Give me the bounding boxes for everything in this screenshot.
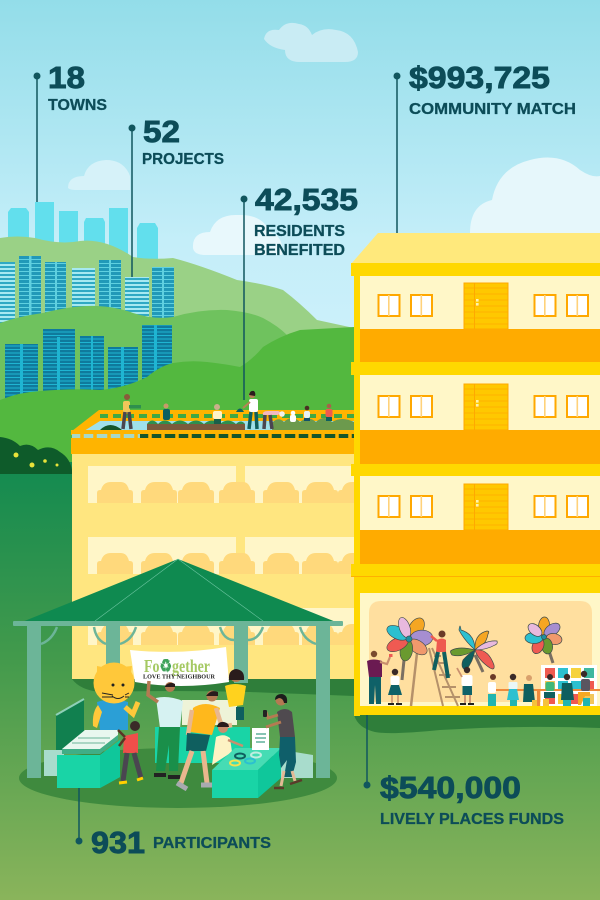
sky background (0, 0, 600, 480)
community match stat: $993,725 (409, 60, 550, 95)
banner: LOVE THY NEIGHBOUR (143, 674, 216, 680)
residents stat (254, 182, 358, 259)
lively places stat (380, 770, 564, 828)
girl (212, 722, 243, 765)
right building shadow (354, 715, 600, 733)
planter bed (100, 420, 245, 431)
lively places stat: $540,000 (380, 770, 521, 805)
ground floor frame (354, 577, 600, 593)
banner: Fo♻gether (144, 656, 210, 676)
ladder (429, 648, 460, 706)
back left table (44, 750, 64, 776)
pinwheel large (385, 615, 433, 662)
pavilion front posts (27, 625, 330, 778)
pavilion back posts (106, 625, 248, 683)
community match stat (409, 60, 576, 118)
cat body (97, 700, 128, 730)
seated children (488, 671, 590, 706)
bush (0, 437, 72, 474)
pinwheel right (525, 617, 563, 656)
bracelets (230, 752, 261, 766)
cloud: top centre (264, 23, 358, 62)
lively places stat: LIVELY PLACES FUNDS (380, 811, 564, 828)
floor 1 (351, 476, 600, 577)
mascot cat (93, 662, 138, 730)
balcony row 2 (88, 537, 374, 574)
towns marker (34, 72, 40, 202)
residents marker (240, 196, 248, 400)
woman with phone (263, 694, 302, 788)
residents stat: 42,535 (255, 182, 358, 217)
residents stat: BENEFITED (254, 242, 345, 259)
table sign (252, 728, 269, 750)
table leg (537, 691, 540, 706)
shelf (541, 665, 597, 706)
woman with watering can (236, 391, 258, 429)
participants stat: 931 (91, 825, 145, 860)
projects stat: 52 (143, 114, 180, 149)
residents stat: RESIDENTS (254, 223, 345, 240)
back railing (72, 410, 354, 431)
display board (182, 700, 237, 725)
man raising arm (148, 681, 183, 777)
cloud: right (470, 158, 600, 233)
rooftop floor (72, 413, 354, 432)
community match stat: COMMUNITY MATCH (409, 101, 576, 118)
front parapet (71, 430, 354, 454)
left table (56, 699, 120, 788)
child painting (457, 667, 474, 704)
back hill (0, 236, 354, 420)
projects stat: PROJECTS (142, 151, 224, 168)
children gardeners (290, 404, 332, 422)
right apartment block (351, 233, 600, 716)
ground (0, 462, 600, 900)
roof (351, 233, 600, 264)
left apartment block (72, 454, 374, 679)
balcony row 3 (88, 608, 374, 645)
community match marker (394, 72, 400, 233)
seated gardener (213, 404, 222, 424)
towns stat: TOWNS (48, 97, 107, 114)
lively places marker (364, 715, 370, 788)
left building shadow (72, 679, 354, 696)
projects stat (142, 114, 224, 168)
cloud: behind residents label (193, 215, 282, 255)
pavilion ground shadow (19, 748, 337, 808)
child in white and skirt (388, 669, 402, 704)
participants stat (91, 825, 271, 860)
towns stat: 18 (48, 60, 85, 95)
pinwheel stems (402, 648, 553, 680)
pavilion roof (13, 559, 343, 626)
bending gardener (263, 411, 285, 429)
background skyline (8, 202, 158, 268)
foreground towers (5, 325, 172, 404)
cat head (94, 662, 134, 704)
balcony row 1 (88, 466, 374, 503)
rooftop garden (71, 391, 354, 454)
front hill (0, 327, 354, 480)
right table (212, 728, 281, 798)
table body (57, 740, 120, 788)
man painting (367, 651, 392, 704)
boy in red (118, 721, 143, 783)
tile game (62, 730, 118, 749)
participants marker (76, 788, 82, 844)
middle hill (0, 306, 354, 440)
game board (56, 699, 84, 750)
towns stat (48, 60, 107, 114)
participants stat: PARTICIPANTS (153, 835, 271, 852)
child gardener (163, 404, 170, 420)
floor 2 (351, 375, 600, 476)
man in yellow (177, 690, 232, 789)
cloud: left (68, 160, 130, 190)
projects marker (128, 124, 136, 277)
floor 3 (351, 276, 600, 375)
planted beds right (272, 418, 354, 431)
pavilion brackets (41, 627, 316, 644)
easel pole (411, 653, 417, 706)
person on ladder (431, 630, 448, 678)
middle towers (0, 256, 174, 342)
craft table (492, 689, 600, 691)
pinwheel middle (450, 626, 497, 670)
banner (130, 647, 229, 686)
person with tray (123, 394, 141, 429)
back right table (270, 748, 313, 778)
back table (155, 722, 250, 763)
woman behind table (225, 669, 246, 720)
